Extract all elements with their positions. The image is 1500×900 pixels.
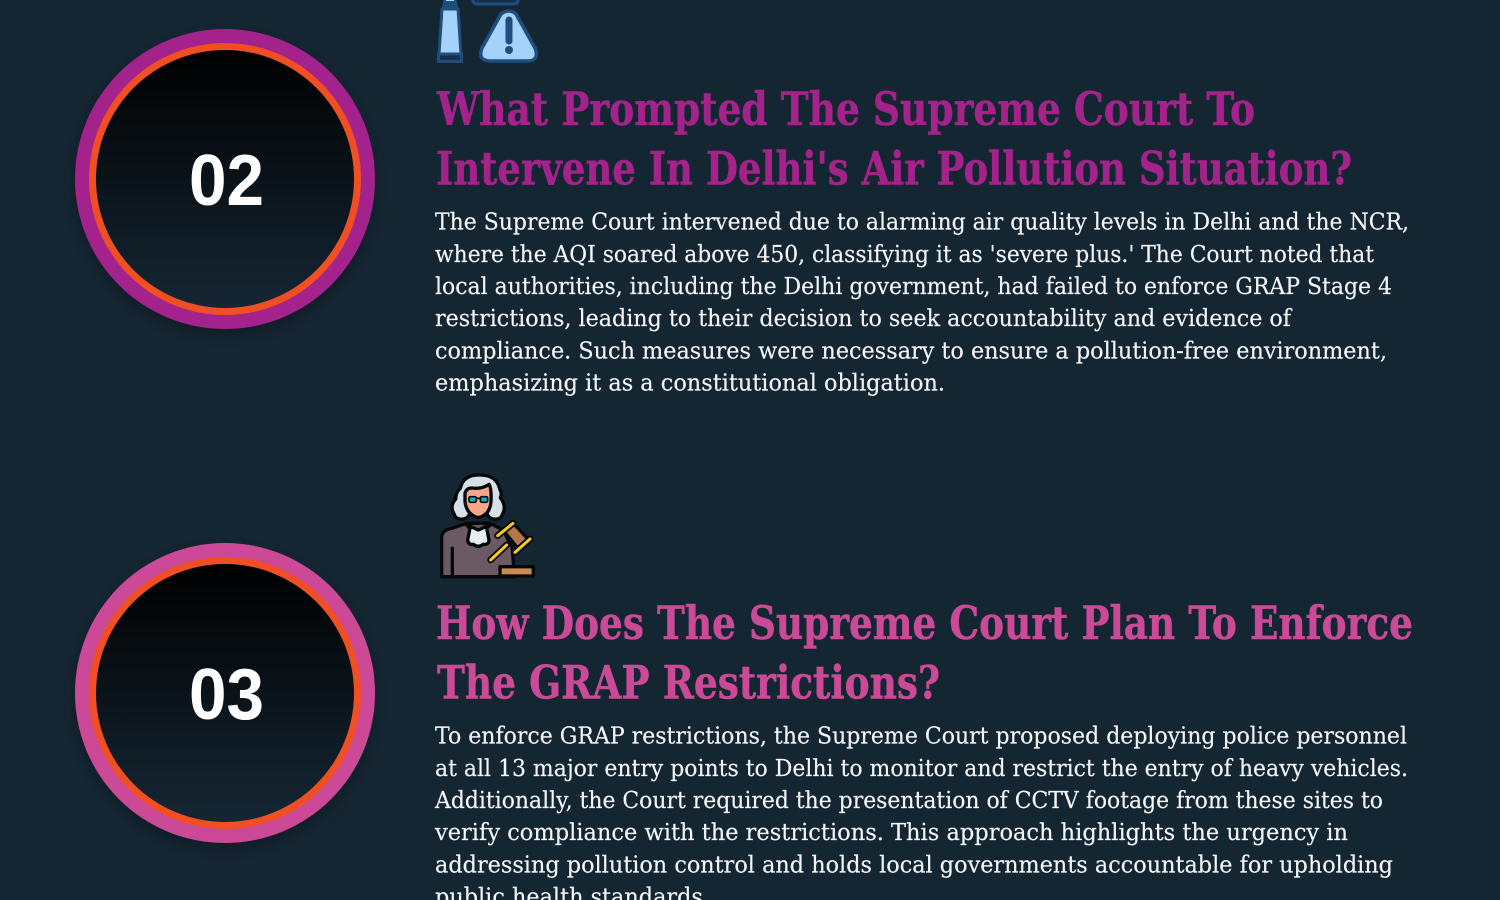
panel: question 02 [75, 0, 1409, 396]
body text: The Supreme Court intervened due to alarming air quality levels in Delhi and the NCR, [435, 208, 1409, 236]
number badge 03 [75, 543, 375, 843]
body text [435, 208, 1409, 396]
body text: Additionally, the Court required the presentation of CCTV footage from these sites to [434, 786, 1383, 814]
icon: air quality warning [438, 0, 536, 62]
heading [436, 596, 1413, 710]
body text: emphasizing it as a constitutional obligation. [435, 368, 945, 396]
heading: What Prompted The Supreme Court To [436, 82, 1255, 136]
number badge 03: 03 [189, 655, 264, 735]
body text [434, 722, 1408, 900]
body text: restrictions, leading to their decision to seek accountability and evidence of [435, 304, 1293, 332]
body text: compliance. Such measures were necessary to ensure a pollution-free environment, [435, 336, 1387, 364]
heading [436, 82, 1352, 196]
body text: local authorities, including the Delhi government, had failed to enforce GRAP Stage 4 [435, 272, 1392, 300]
body text: addressing pollution control and holds local governments accountable for upholding [435, 850, 1393, 878]
number badge 02: 02 [189, 141, 264, 221]
body text: where the AQI soared above 450, classifying it as 'severe plus.' The Court noted that [435, 240, 1375, 268]
body text: verify compliance with the restrictions. This approach highlights the urgency in [434, 818, 1348, 846]
heading: The GRAP Restrictions? [437, 656, 940, 710]
icon: judge with gavel [442, 475, 533, 577]
panel: question 03 [75, 475, 1413, 900]
number badge 02 [75, 29, 375, 329]
body text: at all 13 major entry points to Delhi to monitor and restrict the entry of heavy vehicles. [435, 754, 1408, 782]
body text: To enforce GRAP restrictions, the Supreme Court proposed deploying police personnel [435, 722, 1407, 750]
